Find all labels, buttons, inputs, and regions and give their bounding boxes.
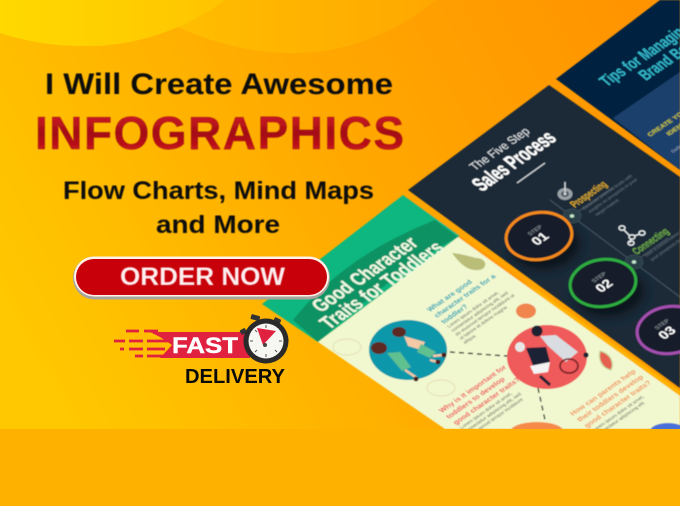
card edge strip — [395, 195, 680, 399]
text: what are good: What are good — [425, 278, 474, 313]
icon: orange slice — [516, 304, 536, 318]
card: good character traits — [262, 195, 680, 442]
icon: outline fruit — [427, 380, 455, 396]
subheading: flow charts: Flow Charts, Mind Maps — [63, 177, 374, 205]
header light green — [262, 195, 460, 342]
text: prospecting body: insights on prospects in your — [587, 177, 639, 214]
text: how can parents: their toddlers develop — [575, 373, 646, 423]
step 02: 02 — [592, 277, 616, 295]
heading: i will create awesome: I Will Create Awesome — [45, 68, 393, 101]
step 02: STEP — [591, 272, 608, 284]
dashed connector — [450, 352, 507, 356]
heading: infographics: INFOGRAPHICS — [35, 107, 404, 159]
heading: sales process: Sales Process — [466, 127, 561, 195]
speed lines — [114, 331, 168, 356]
text: what are good: toddler? — [439, 302, 470, 325]
illustration: caregiver with wheelchair — [507, 325, 589, 389]
step 03 — [634, 302, 680, 358]
dashed connector — [538, 388, 545, 420]
text: how can parents: Lorem ipsum dolor sit amet, — [591, 395, 646, 433]
icon: pear — [452, 253, 485, 270]
blue semicircle — [650, 423, 680, 439]
title — [307, 233, 449, 333]
step 02 — [567, 255, 647, 321]
text: why is it important: Why is it important for — [437, 363, 509, 414]
icon: stopwatch — [239, 314, 288, 364]
text: how can parents: consectetur adipiscing elit — [595, 401, 647, 437]
icon: outline fruit — [333, 339, 361, 355]
text: what are good: do eiusmod tempor incididunt ut — [454, 293, 517, 337]
text: how can parents: How can parents help — [568, 367, 638, 417]
badge: fast delivery — [114, 314, 288, 388]
cream body — [318, 237, 680, 429]
fast label: FAST — [172, 333, 239, 358]
text: how can parents — [568, 367, 654, 437]
text: why is it important: toddlers to develop — [444, 375, 508, 420]
icon: watermelon — [599, 351, 612, 370]
button: order now: ORDER NOW — [120, 263, 285, 291]
step 01: 01 — [528, 229, 552, 248]
text: what are good: ut labore et dolore magna — [458, 305, 509, 341]
card: sales process — [408, 85, 680, 388]
text: why is it important: good character traits? — [451, 375, 523, 426]
delivery label: DELIVERY — [185, 366, 286, 388]
title: Traits for Toddlers — [315, 237, 449, 333]
card band — [613, 72, 680, 170]
subheading: and more: and More — [156, 211, 280, 239]
fast banner — [150, 332, 250, 358]
text: why is it important — [437, 363, 525, 438]
node: connecting — [625, 255, 643, 269]
node: prospecting — [563, 209, 581, 223]
text: how can parents: good character traits? — [582, 378, 654, 429]
step 03: STEP — [654, 319, 671, 331]
title: Good Character — [307, 233, 424, 316]
step 01 — [503, 208, 583, 274]
button: order now — [73, 256, 330, 300]
step 03: 03 — [655, 323, 679, 342]
text: why is it important: consectetur adipiscing elit, sed — [463, 392, 523, 434]
text: what are good: character traits for a — [432, 272, 499, 319]
heading underline — [517, 163, 545, 183]
orange semicircle — [510, 422, 564, 442]
text: what are good: aliqua — [462, 334, 478, 345]
icon: target — [558, 182, 572, 200]
bottom band — [0, 429, 680, 506]
connector lines — [550, 188, 680, 297]
swoosh: yellow — [0, 0, 225, 46]
text: what are good: Lorem ipsum dolor sit amet, — [446, 291, 501, 329]
text: what are good — [425, 272, 517, 345]
label: prospecting: Prospecting — [568, 179, 610, 210]
text: why is it important: do eiusmod tempor incididunt — [467, 397, 525, 438]
icon: connecting network — [619, 226, 645, 245]
header dark green — [293, 220, 458, 342]
card: brand tips — [556, 0, 680, 170]
text: what are good: consectetur adipiscing elit, sed — [450, 291, 510, 333]
step 01: STEP — [527, 225, 544, 237]
heading: the five step: The Five Step — [466, 125, 533, 173]
text: prospecting body: Generate potential leads with — [581, 173, 634, 211]
illustration: two children — [369, 320, 447, 381]
text: why is it important: Lorem ipsum dolor sit amet, — [459, 392, 514, 430]
text: prospecting body: target market. — [594, 197, 621, 217]
swoosh: amber — [150, 0, 436, 53]
